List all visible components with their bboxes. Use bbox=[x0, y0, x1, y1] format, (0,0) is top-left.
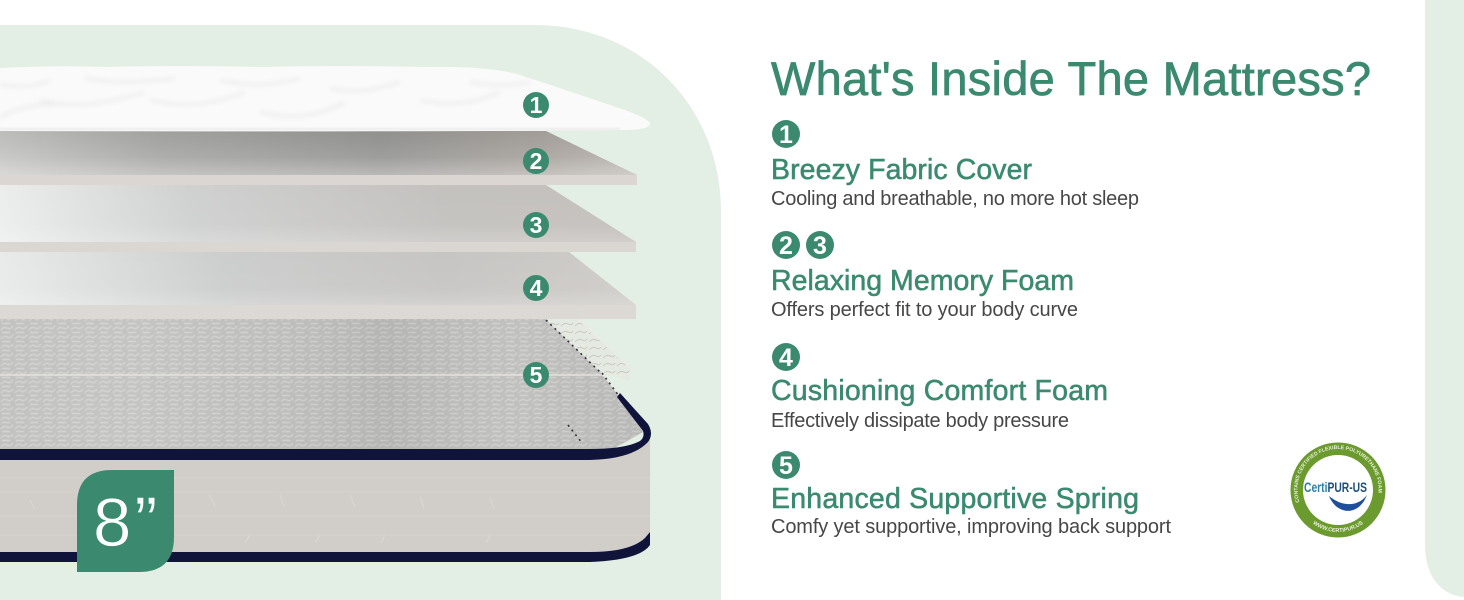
layer 1: fabric cover bbox=[0, 66, 650, 131]
mattress layers illustration bbox=[0, 66, 651, 562]
number icons 2 and 3: 3 bbox=[813, 232, 827, 260]
CertiPUR-US certification seal: WWW.CERTIPUR.US bbox=[1314, 520, 1363, 532]
feature 3: cushioning comfort foam bbox=[771, 343, 1108, 432]
layer marker 3 bbox=[523, 212, 549, 238]
number icon 5: 5 bbox=[779, 452, 793, 480]
panel: green background bbox=[0, 25, 721, 600]
layer 5: spring unit bbox=[0, 319, 651, 460]
height badge: 8 inch: ” bbox=[134, 483, 157, 560]
feature 2: relaxing memory foam: Relaxing Memory Foam bbox=[771, 265, 1074, 297]
number icon 1: 1 bbox=[779, 121, 793, 149]
feature 4: enhanced supportive spring: Comfy yet supportive, improving back support bbox=[771, 516, 1171, 538]
feature 4: enhanced supportive spring bbox=[771, 451, 1171, 538]
feature 2: relaxing memory foam bbox=[771, 231, 1078, 321]
layer marker 1 bbox=[523, 92, 549, 118]
feature 3: cushioning comfort foam: Cushioning Comfort Foam bbox=[771, 375, 1108, 407]
number icon 4: 4 bbox=[779, 344, 793, 372]
layer 2: memory foam bbox=[0, 131, 637, 185]
layer marker 1: 1 bbox=[530, 92, 543, 118]
layer 4: comfort foam bbox=[0, 252, 636, 319]
layer marker 5 bbox=[523, 362, 549, 388]
feature 1: breezy fabric cover bbox=[771, 120, 1139, 210]
layer 3: memory foam bbox=[0, 185, 636, 252]
layer marker 2 bbox=[523, 148, 549, 174]
number icon 1 bbox=[772, 120, 800, 149]
mattress base side bbox=[0, 437, 650, 562]
height badge: 8 inch: 8 bbox=[93, 484, 131, 561]
CertiPUR-US certification seal: CONTAINS CERTIFIED FLEXIBLE POLYURETHANE FOAM bbox=[1294, 445, 1382, 502]
panel: right edge strip bbox=[1425, 0, 1464, 597]
number icons 2 and 3 bbox=[772, 231, 834, 260]
layer marker 2: 2 bbox=[530, 148, 542, 174]
feature 1: breezy fabric cover: Cooling and breathable, no more hot sleep bbox=[771, 188, 1139, 210]
number icons 2 and 3: 2 bbox=[779, 232, 793, 260]
feature 3: cushioning comfort foam: Effectively dissipate body pressure bbox=[771, 410, 1069, 432]
feature 4: enhanced supportive spring: Enhanced Supportive Spring bbox=[771, 483, 1139, 515]
layer marker 5: 5 bbox=[530, 362, 543, 388]
CertiPUR-US certification seal: CertiPUR-US bbox=[1304, 479, 1367, 495]
number icon 5 bbox=[772, 451, 800, 480]
layer marker 3: 3 bbox=[530, 212, 542, 238]
CertiPUR-US certification seal bbox=[1290, 442, 1386, 538]
layer marker 4 bbox=[523, 275, 549, 301]
height badge: 8 inch bbox=[77, 470, 174, 572]
layer marker 4: 4 bbox=[530, 275, 543, 301]
feature 1: breezy fabric cover: Breezy Fabric Cover bbox=[771, 154, 1032, 186]
number icon 4 bbox=[772, 343, 800, 372]
feature 2: relaxing memory foam: Offers perfect fit to your body curve bbox=[771, 299, 1078, 321]
title: What's Inside The Mattress? bbox=[771, 52, 1371, 105]
